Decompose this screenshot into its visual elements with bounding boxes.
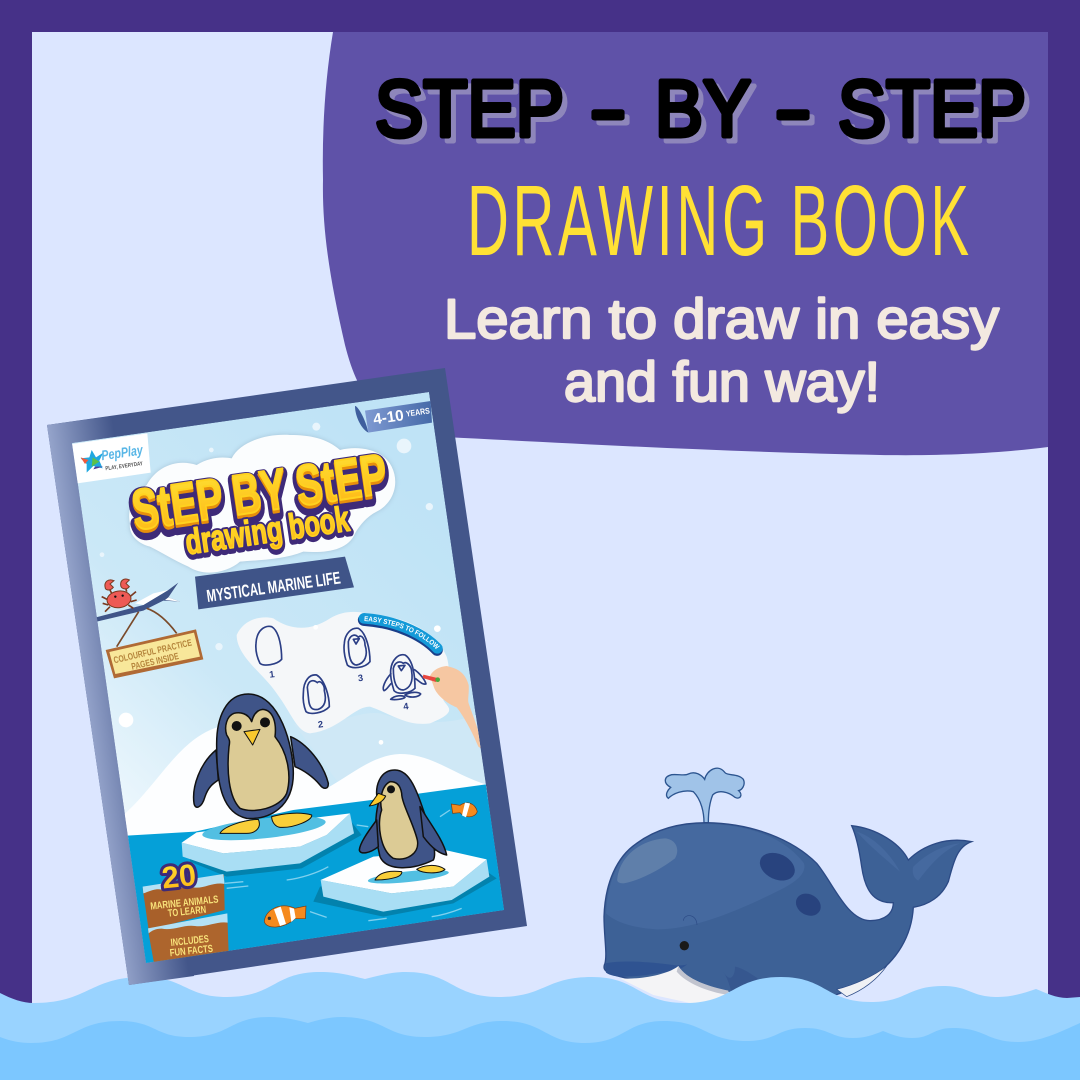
title: step by step — [375, 64, 1031, 158]
small penguin — [359, 770, 447, 880]
wood sign: fun facts — [148, 913, 229, 963]
white step cloud — [237, 612, 449, 733]
cover subtitle: drawing book — [183, 501, 352, 564]
marine life banner — [195, 557, 354, 609]
subtitle: drawing book: DRAWING BOOK — [467, 166, 973, 277]
whale lip — [605, 962, 687, 977]
wood sign: marine animals — [143, 874, 225, 930]
ice floe large — [182, 812, 362, 877]
sea — [127, 784, 510, 967]
book — [47, 368, 527, 985]
snow dot — [119, 713, 133, 727]
logo box: PepPlay — [100, 441, 145, 463]
clownfish large — [264, 906, 306, 927]
whale belly — [620, 966, 732, 1007]
snow hill — [123, 727, 490, 840]
logo box: PLAY, EVERYDAY — [105, 461, 143, 472]
step numbers — [269, 669, 410, 730]
ice floe small — [313, 850, 497, 917]
practice pages sign: PAGES INSIDE — [130, 651, 180, 672]
number 20: 20 — [160, 858, 198, 895]
whale highlight — [617, 838, 677, 883]
title: step by step: STEP — [375, 64, 564, 153]
header panel — [323, 32, 1048, 455]
clownfish small — [451, 803, 477, 817]
logo box — [72, 433, 151, 483]
whale fin — [723, 967, 760, 993]
logo star — [81, 450, 103, 473]
title: step by step: - — [590, 64, 626, 153]
practice pages sign — [106, 629, 203, 678]
cover subtitle — [184, 504, 354, 560]
age ribbon — [355, 401, 432, 433]
hanging ropes — [117, 608, 177, 647]
cover title: StEP BY StEP — [128, 445, 391, 546]
whale belly shade — [677, 966, 728, 995]
whale belly right — [837, 966, 887, 997]
steps scene — [236, 612, 481, 748]
branch — [96, 583, 180, 622]
branch snow — [135, 590, 180, 605]
cover title: StEP BY StEP — [128, 442, 391, 543]
hand with pencil — [423, 666, 483, 750]
easy steps ribbon: EASY STEPS TO FOLLOW — [364, 616, 440, 649]
step outlines — [256, 626, 426, 713]
wood sign: fun facts: INCLUDES — [170, 934, 209, 949]
title: step by step: STEP — [380, 69, 569, 158]
title: step by step: - — [780, 69, 816, 158]
book spine shading — [47, 416, 194, 985]
whale tail highlights — [857, 832, 960, 881]
cover title — [128, 453, 389, 540]
cover subtitle: drawing book — [183, 500, 352, 562]
wood sign: fun facts: FUN FACTS — [169, 944, 214, 959]
back wave — [0, 972, 1080, 1080]
water ripples — [225, 810, 462, 921]
whale eye — [680, 941, 689, 950]
upper scene — [72, 401, 433, 678]
title: step by step: - — [775, 64, 811, 153]
title cloud shadow — [129, 435, 395, 573]
whale spots — [755, 847, 825, 920]
step numbers: 1 — [269, 669, 275, 680]
sky — [72, 392, 504, 963]
step numbers: 2 — [317, 719, 324, 730]
age ribbon: YEARS — [405, 405, 431, 419]
wood sign: marine animals: TO LEARN — [167, 905, 207, 920]
whale blowhole — [683, 916, 697, 925]
crab — [102, 579, 137, 612]
title: step by step: BY — [660, 69, 756, 158]
wood sign: marine animals: MARINE ANIMALS — [150, 894, 219, 913]
step numbers: 3 — [357, 673, 364, 683]
title: step by step: - — [595, 69, 631, 158]
step numbers: 4 — [403, 701, 410, 712]
front wave — [0, 1017, 1080, 1080]
snow dots — [100, 423, 433, 650]
whale spout — [665, 768, 744, 823]
back hill — [391, 715, 488, 794]
title: step by step: STEP — [838, 64, 1026, 153]
tagline: Learn to draw in easy — [444, 287, 999, 350]
cover title: StEP BY StEP — [128, 447, 391, 548]
cover artwork — [72, 392, 504, 963]
large penguin — [194, 694, 328, 833]
whale — [604, 768, 972, 1007]
title: step by step: STEP — [843, 69, 1031, 158]
title: step by step: BY — [655, 64, 751, 153]
lower scene — [119, 694, 510, 967]
book cover frame — [47, 368, 527, 985]
tagline — [444, 287, 999, 413]
age ribbon: 4-10 — [372, 407, 405, 428]
snow dots — [313, 625, 441, 745]
title cloud — [129, 435, 395, 573]
whale back shading — [606, 824, 804, 929]
practice pages sign: COLOURFUL PRACTICE — [113, 638, 193, 665]
tagline: and fun way! — [564, 350, 880, 413]
marine life banner: MYSTICAL MARINE LIFE — [205, 567, 342, 606]
whale body — [604, 823, 972, 1003]
